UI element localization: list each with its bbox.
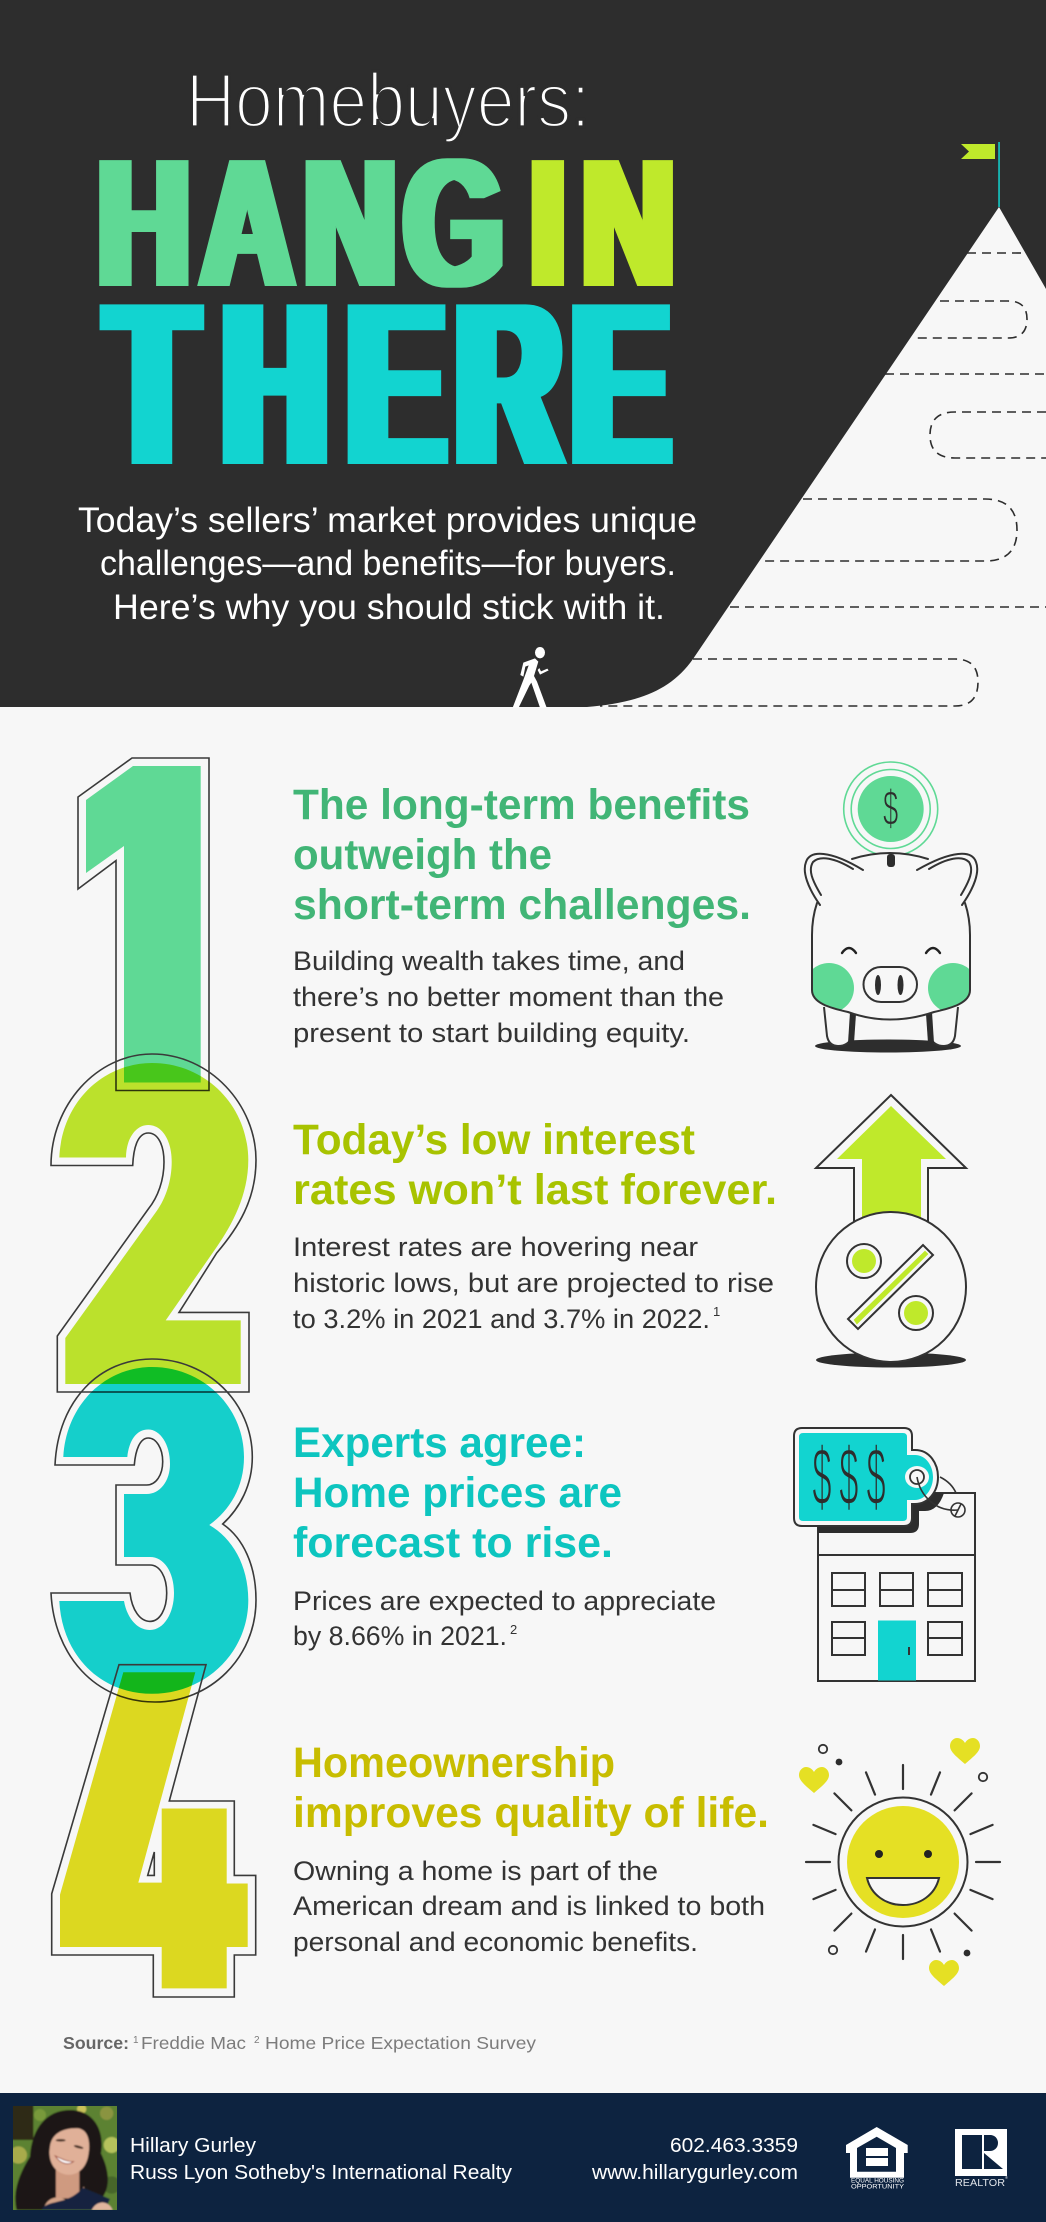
agent name: Russ Lyon Sotheby's International Realty	[130, 2162, 512, 2184]
header subtitle: Here’s why you should stick with it.	[113, 588, 665, 627]
logo: equal housing opportunity	[846, 2127, 908, 2191]
decorative dots	[819, 1745, 987, 1956]
door	[878, 1620, 916, 1680]
icon: summit flag	[961, 142, 1000, 207]
tag shadow	[818, 1493, 944, 1533]
source note	[63, 2033, 536, 2053]
agent contact: www.hillarygurley.com	[591, 2162, 798, 2184]
heading 1: short-term challenges.	[293, 881, 751, 929]
heading 2: rates won’t last forever.	[293, 1166, 777, 1214]
source note: 1	[133, 2035, 139, 2046]
icon: percent with up arrow	[816, 1095, 966, 1368]
heading 3: Home prices are	[293, 1469, 622, 1517]
header background	[0, 0, 1046, 707]
agent contact: 602.463.3359	[670, 2135, 798, 2157]
percent shadow	[816, 1352, 966, 1368]
pig face	[842, 948, 940, 1002]
body 3: 2	[510, 1622, 517, 1637]
body 3: Prices are expected to appreciate	[293, 1586, 716, 1616]
body 4: American dream and is linked to both	[293, 1891, 765, 1921]
source note: Freddie Mac	[141, 2033, 246, 2053]
heading 1: outweigh the	[293, 831, 552, 879]
coin	[844, 762, 938, 856]
source note: 2	[254, 2035, 260, 2046]
sun rays	[806, 1765, 1000, 1959]
source note: Home Price Expectation Survey	[265, 2033, 536, 2053]
title: Homebuyers: Homebuyers:	[186, 58, 590, 144]
tag string	[917, 1477, 965, 1517]
heading 1	[293, 781, 751, 929]
percent sign	[847, 1244, 933, 1330]
header subtitle: challenges—and benefits—for buyers.	[100, 544, 676, 583]
pig cheeks	[813, 963, 969, 1010]
body 1	[293, 946, 724, 1048]
body 1: present to start building equity.	[293, 1018, 690, 1048]
heading 1: The long-term benefits	[293, 781, 750, 829]
logo: realtor	[955, 2129, 1008, 2189]
coin: $	[883, 779, 898, 836]
numeral 4	[50, 1664, 256, 1998]
title: HANG IN: HANG	[98, 121, 504, 325]
logo: equal housing opportunity: EQUAL HOUSING	[851, 2178, 904, 2185]
house	[818, 1493, 975, 1681]
panel: agent footer	[0, 2093, 1046, 2222]
hearts	[799, 1738, 980, 1986]
title: THERE: THERE	[108, 254, 668, 513]
body 1: Building wealth takes time, and	[293, 946, 685, 976]
price tag	[794, 1428, 938, 1526]
agent photo	[13, 2106, 117, 2210]
heading 2: Today’s low interest	[293, 1116, 695, 1164]
heading 2	[293, 1116, 777, 1214]
heading 3: forecast to rise.	[293, 1519, 613, 1567]
pig outline	[805, 853, 977, 1020]
mountain illustration	[587, 207, 1046, 707]
panel: benefit 3 text	[293, 1419, 716, 1651]
heading 4: improves quality of life.	[293, 1789, 769, 1837]
heading 3: Experts agree:	[293, 1419, 586, 1467]
body 2: historic lows, but are projected to rise	[293, 1268, 774, 1298]
icon: smiling sun with hearts	[799, 1738, 1000, 1986]
pig shadow	[815, 1040, 961, 1052]
panel: benefit 4 text	[293, 1739, 769, 1957]
icon: house with price tag	[794, 1428, 975, 1681]
smiley face	[838, 1798, 968, 1926]
agent contact	[591, 2135, 798, 2184]
icon: walking figure	[513, 647, 549, 708]
pig legs	[824, 1007, 958, 1046]
numeral 3: 3	[58, 1298, 254, 1762]
body 4	[293, 1856, 765, 1957]
body 3	[293, 1586, 716, 1651]
icon: piggy bank with coin	[804, 762, 978, 1052]
agent name: Hillary Gurley	[130, 2135, 256, 2157]
panel: benefit 2 text	[293, 1116, 777, 1334]
heading 4: Homeownership	[293, 1739, 615, 1787]
body 3: by 8.66% in 2021.	[293, 1621, 507, 1651]
price tag: $	[839, 1431, 859, 1523]
logo: equal housing opportunity: OPPORTUNITY	[851, 2184, 905, 2191]
numeral 4: 4	[66, 1611, 248, 2059]
header subtitle: Today’s sellers’ market provides unique	[78, 501, 697, 540]
pig body	[812, 853, 970, 1020]
arrow	[816, 1095, 966, 1225]
header subtitle	[78, 501, 697, 627]
title: HANG IN: IN	[530, 121, 675, 325]
logo: realtor: REALTOR	[955, 2178, 1005, 2189]
logo: realtor: ®	[1005, 2175, 1008, 2180]
heading 4	[293, 1739, 769, 1837]
heading 3	[293, 1419, 622, 1567]
price tag: $	[812, 1431, 832, 1523]
body 2: 1	[713, 1304, 720, 1319]
body 2: Interest rates are hovering near	[293, 1232, 698, 1262]
percent circle	[816, 1212, 966, 1362]
coin slot	[887, 854, 895, 867]
body 4: personal and economic benefits.	[293, 1927, 698, 1957]
agent name	[130, 2135, 512, 2184]
source note: Source:	[63, 2033, 129, 2053]
panel: header	[0, 0, 1046, 708]
body 1: there’s no better moment than the	[293, 982, 724, 1012]
body 4: Owning a home is part of the	[293, 1856, 658, 1886]
body 2	[293, 1232, 774, 1334]
body 2: to 3.2% in 2021 and 3.7% in 2022.	[293, 1304, 710, 1334]
numeral 1	[77, 757, 210, 1092]
price tag: $	[866, 1431, 886, 1523]
panel: benefit 1 text	[293, 781, 751, 1048]
numeral 2: 2	[58, 998, 252, 1456]
numeral 1: 1	[50, 672, 282, 1163]
